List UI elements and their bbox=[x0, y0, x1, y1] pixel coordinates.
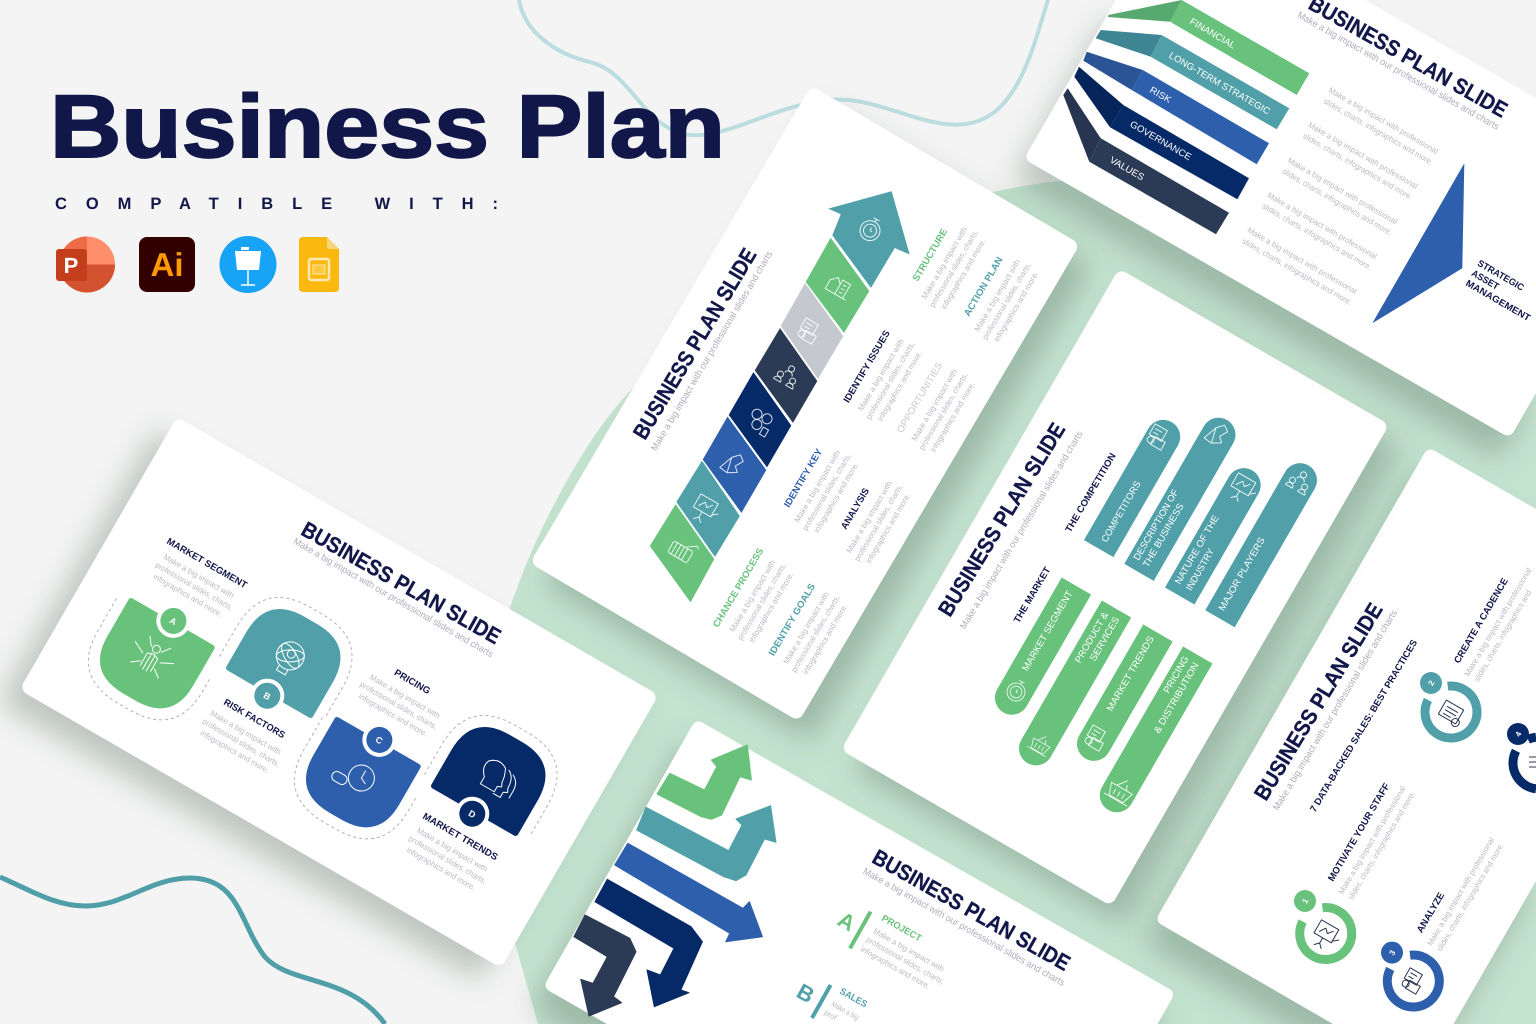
text block: opportunities: OPPORTUNITIES bbox=[895, 361, 945, 435]
slide background bbox=[530, 86, 1080, 721]
text block: identify issues: professional slides, charts, bbox=[864, 340, 917, 421]
text block: project: PROJECT bbox=[880, 913, 923, 944]
rising segmented arrow bbox=[649, 190, 911, 604]
pill: competitors bbox=[1084, 414, 1186, 557]
slide background bbox=[20, 417, 659, 968]
pill labels: THE BUSINESS bbox=[1141, 502, 1187, 570]
ribbon: values: VALUES bbox=[1108, 155, 1146, 183]
text block: motivate your staff: Make a big impact with professional bbox=[1337, 784, 1408, 896]
ribbon: risk bbox=[1083, 52, 1269, 164]
text block: identify issues: Make a big impact with bbox=[856, 337, 906, 413]
ribbon: long-term strategic bbox=[1096, 30, 1289, 129]
text block: chance process bbox=[711, 546, 798, 648]
text block: motivate your staff: MOTIVATE YOUR STAFF bbox=[1326, 781, 1393, 884]
slide subtitle: Make a big impact with our professional slides and charts bbox=[1271, 608, 1400, 813]
slate arrow bbox=[574, 915, 636, 1016]
ring 2 bbox=[1420, 672, 1480, 741]
icon: illustrator bbox=[139, 237, 195, 292]
text block: market trends: Make a big impact with bbox=[415, 826, 489, 874]
text block: pricing: Make a big impact with bbox=[368, 673, 442, 720]
text block: opportunities: professional slides, charts, bbox=[917, 371, 970, 452]
text block: chance process: professional slides, charts, bbox=[736, 561, 788, 642]
text block: analyze: slides, charts, infographics and more. bbox=[1435, 841, 1506, 953]
pill: major players bbox=[1205, 457, 1323, 627]
green background blob bbox=[505, 181, 1536, 1024]
card C bbox=[277, 695, 440, 856]
text block: analyze: Make a big impact with professional bbox=[1426, 836, 1496, 947]
pill labels: SERVICES bbox=[1088, 615, 1122, 663]
ring 1 bbox=[1294, 890, 1355, 962]
ring 2: 2 bbox=[1426, 679, 1437, 687]
text block: identify key: infographics and more. bbox=[812, 461, 861, 534]
ribbon: governance bbox=[1074, 67, 1249, 199]
text block: market segment: Make a big impact with bbox=[162, 552, 236, 600]
body text rows: Make a big impact with professional bbox=[1327, 86, 1440, 156]
text block: chance process: Make a big impact with bbox=[728, 558, 777, 634]
text block: market segment bbox=[146, 536, 249, 622]
panel: slide with numbered rings bbox=[1158, 450, 1536, 1024]
text block: structure: infographics and more. bbox=[939, 237, 988, 311]
text block: identify key: Make a big impact with bbox=[793, 449, 842, 524]
text block: market segment: infographics and more. bbox=[152, 572, 224, 619]
teal arrow bbox=[637, 806, 776, 881]
text block: market trends: professional slides, charts, bbox=[407, 834, 488, 886]
pill: market trends bbox=[1071, 624, 1173, 767]
text block: sales: SALES bbox=[838, 986, 869, 1010]
text block: identify goals: IDENTIFY GOALS bbox=[767, 582, 818, 658]
ring 3: 3 bbox=[1387, 948, 1398, 957]
pill labels: COMPETITORS bbox=[1100, 479, 1144, 544]
panel: slide market and competition pills bbox=[841, 268, 1389, 906]
text block: sales: prof bbox=[823, 1008, 839, 1023]
panel: slide with merging arrows bbox=[546, 722, 1173, 1024]
ribbon: financial: FINANCIAL bbox=[1188, 16, 1237, 51]
blue triangle bbox=[1372, 163, 1464, 323]
slide subtitle: Make a big impact with our professional slides and charts bbox=[649, 249, 775, 453]
body text rows: slides, charts, infographics and more. bbox=[1261, 202, 1373, 272]
teal divider bbox=[812, 985, 831, 1018]
main title: Business Plan bbox=[50, 76, 725, 176]
text block: identify goals bbox=[765, 579, 851, 679]
pill labels: DESCRIPTION OF bbox=[1132, 488, 1181, 562]
body text rows: Make a big impact with professional bbox=[1266, 191, 1379, 261]
pill labels: INDUSTRY bbox=[1184, 546, 1217, 593]
text block: risk factors: Make a big impact with bbox=[209, 709, 283, 757]
ring 1: 1 bbox=[1300, 897, 1311, 905]
text block: action plan: professional slides, charts, bbox=[981, 261, 1033, 341]
bottom teal swirl line bbox=[0, 877, 385, 1024]
icon: powerpoint bbox=[56, 236, 115, 293]
text block: risk factors: infographics and more. bbox=[199, 728, 271, 775]
pill labels: MARKET SEGMENT bbox=[1020, 589, 1075, 673]
slide title: BUSINESS PLAN SLIDE bbox=[628, 244, 762, 444]
text block: structure bbox=[904, 214, 990, 314]
body text rows: slides, charts, infographics and more. bbox=[1322, 97, 1435, 167]
text block: analysis: ANALYSIS bbox=[839, 486, 872, 532]
text block: risk factors: RISK FACTORS bbox=[222, 697, 287, 741]
text block: project: infographics and more. bbox=[859, 945, 932, 991]
label: the competition: THE COMPETITION bbox=[1064, 451, 1119, 535]
label: the market: THE MARKET bbox=[1012, 565, 1053, 625]
icon: google slides bbox=[299, 237, 339, 292]
text block: structure: STRUCTURE bbox=[911, 227, 950, 284]
text block: pricing bbox=[353, 655, 453, 741]
pill labels bbox=[1020, 479, 1268, 736]
text block: structure: Make a big impact with bbox=[920, 225, 969, 301]
icon: keynote bbox=[220, 236, 276, 293]
pill labels: PRODUCT & bbox=[1073, 610, 1111, 665]
text block: market trends bbox=[402, 811, 501, 895]
pill labels: MARKET TRENDS bbox=[1105, 634, 1157, 714]
text block: motivate your staff bbox=[1323, 776, 1417, 901]
body text rows: slides, charts, infographics and more. bbox=[1281, 167, 1394, 237]
panel: slide with rising arrow bbox=[530, 86, 1080, 721]
ring 4: 4 bbox=[1513, 730, 1524, 738]
text block: create a cadence: CREATE A CADENCE bbox=[1452, 576, 1511, 666]
text block: opportunities bbox=[893, 357, 979, 457]
panel: slide with four rounded cards bbox=[20, 417, 659, 968]
text block: sales bbox=[823, 985, 869, 1024]
text block: analysis: Make a big impact with bbox=[845, 479, 894, 555]
pill icons bbox=[1004, 422, 1315, 806]
compatible with label: COMPATIBLE WITH: bbox=[55, 195, 498, 213]
text block: create a cadence: slides, charts, infographics and bbox=[1472, 588, 1533, 683]
text block: analysis bbox=[828, 468, 914, 568]
pill: description of the business bbox=[1124, 411, 1242, 581]
pill: pricing and distribution bbox=[1094, 646, 1213, 819]
text block: project: Make a big impact with bbox=[872, 926, 946, 974]
ribbon: values bbox=[1063, 88, 1229, 234]
pill: market segment bbox=[989, 578, 1091, 721]
pill labels: NATURE OF THE bbox=[1173, 513, 1222, 586]
ribbon: long-term strategic: LONG-TERM STRATEGIC bbox=[1167, 50, 1272, 117]
body text rows: Make a big impact with professional bbox=[1306, 120, 1419, 191]
panel: top slide with ribbons bbox=[1027, 0, 1536, 435]
top light swirl line bbox=[519, 0, 1048, 135]
text block: identify goals: infographics and more. bbox=[801, 602, 849, 676]
text block: pricing: professional slides, charts, bbox=[358, 680, 439, 732]
text block: risk factors: professional slides, charts, bbox=[201, 717, 281, 769]
ribbon: risk: RISK bbox=[1148, 85, 1174, 106]
slide background bbox=[841, 268, 1389, 906]
green divider bbox=[850, 912, 871, 948]
letter A: A bbox=[834, 907, 860, 936]
text block: identify issues bbox=[840, 326, 926, 426]
ring 3 bbox=[1381, 942, 1442, 1010]
text block: action plan: infographics and more. bbox=[992, 270, 1041, 343]
card A bbox=[71, 576, 234, 737]
text block: market segment: professional slides, charts, bbox=[154, 560, 234, 612]
pill labels: MAJOR PLAYERS bbox=[1217, 536, 1268, 613]
card B bbox=[206, 580, 369, 741]
text block: identify key bbox=[777, 438, 863, 538]
slide subtitle: Make a big impact with our professional slides and charts bbox=[861, 866, 1067, 989]
ribbon: financial bbox=[1108, 0, 1309, 95]
text block: pricing: PRICING bbox=[392, 667, 432, 697]
text block: opportunities: infographics and more. bbox=[929, 380, 977, 454]
text block: structure: professional slides, charts, bbox=[928, 228, 980, 309]
body text rows: Make a big impact with professional bbox=[1286, 156, 1399, 226]
icon: illustrator: Ai bbox=[150, 246, 184, 283]
text block: identify issues: IDENTIFY ISSUES bbox=[842, 329, 893, 405]
text block: create a cadence: Make a big impact with professional bbox=[1463, 566, 1534, 678]
slide background bbox=[546, 722, 1173, 1024]
text block: analysis: professional slides, charts, bbox=[853, 482, 905, 563]
pill: nature of the industry bbox=[1165, 462, 1267, 604]
letter B: B bbox=[793, 979, 819, 1008]
slide background bbox=[1158, 450, 1536, 1024]
text block: motivate your staff: slides, charts, infographics and more. bbox=[1346, 790, 1417, 901]
body text rows bbox=[1240, 86, 1441, 307]
text block: analyze bbox=[1412, 828, 1506, 953]
card D bbox=[411, 698, 574, 859]
slide background bbox=[1027, 0, 1536, 435]
text block: identify goals: professional slides, charts, bbox=[790, 593, 842, 674]
text block: market trends: MARKET TRENDS bbox=[420, 811, 500, 863]
body text rows: slides, charts, infographics and more. bbox=[1301, 131, 1414, 202]
text block: action plan: ACTION PLAN bbox=[962, 255, 1006, 319]
text block: action plan: Make a big impact with bbox=[973, 258, 1022, 333]
card D: D bbox=[467, 808, 478, 820]
text block: analysis: infographics and more. bbox=[864, 491, 912, 565]
pill labels: PRICING bbox=[1162, 654, 1192, 695]
text block: risk factors bbox=[195, 693, 295, 778]
text block: identify key: IDENTIFY KEY bbox=[782, 446, 825, 510]
icon: powerpoint: P bbox=[64, 253, 78, 278]
body text rows: Make a big impact with professional bbox=[1246, 226, 1359, 296]
slide subtitle: Make a big impact with our professional slides and charts bbox=[291, 536, 495, 660]
label: strategic asset management: STRATEGIC bbox=[1475, 258, 1526, 294]
pill labels: & DISTRIBUTION bbox=[1152, 661, 1202, 736]
slide title: BUSINESS PLAN SLIDE bbox=[868, 844, 1075, 976]
green arrow bbox=[657, 745, 751, 819]
card C: C bbox=[374, 734, 385, 747]
text block: market trends: infographics and more. bbox=[405, 845, 477, 892]
text block: pricing: infographics and more. bbox=[357, 692, 429, 739]
text block: identify goals: Make a big impact with bbox=[782, 590, 831, 666]
text block: project: professional slides, charts, bbox=[865, 935, 946, 986]
label: strategic asset management: ASSET bbox=[1469, 268, 1501, 293]
label: strategic asset management: MANAGEMENT bbox=[1464, 278, 1532, 324]
slide title: BUSINESS PLAN SLIDE bbox=[933, 418, 1070, 621]
navy arrow bbox=[595, 879, 702, 1007]
text block: analyze: ANALYZE bbox=[1415, 891, 1447, 935]
slide subtitle: Make a big impact with our professional slides and charts bbox=[958, 429, 1086, 631]
slide subtitle: Make a big impact with our professional slides and charts bbox=[1295, 10, 1501, 133]
label: strategic asset management bbox=[1464, 258, 1532, 324]
slide title: BUSINESS PLAN SLIDE bbox=[297, 517, 505, 649]
body text rows: slides, charts, infographics and more. bbox=[1241, 237, 1353, 307]
slide title: BUSINESS PLAN SLIDE bbox=[1249, 599, 1388, 805]
ribbon: governance: GOVERNANCE bbox=[1128, 119, 1193, 163]
sub heading: 7 DATA-BACKED SALES: BEST PRACTICES bbox=[1308, 638, 1420, 814]
text block: market segment: MARKET SEGMENT bbox=[164, 536, 249, 591]
ring 4 bbox=[1507, 723, 1536, 789]
text block: identify key: professional slides, charts, bbox=[801, 452, 853, 532]
text block: project bbox=[859, 912, 959, 996]
card A: A bbox=[168, 615, 179, 628]
text block: opportunities: Make a big impact with bbox=[910, 367, 959, 443]
text block: chance process: CHANCE PROCESS bbox=[711, 546, 766, 630]
arrow icons bbox=[668, 214, 885, 565]
text block: chance process: infographics and more. bbox=[747, 570, 796, 644]
pill: product and services bbox=[1013, 600, 1131, 772]
text block: action plan bbox=[957, 247, 1043, 347]
blue arrow bbox=[615, 843, 762, 942]
text block: identify issues: infographics and more. bbox=[876, 349, 924, 423]
card B: B bbox=[262, 690, 273, 702]
